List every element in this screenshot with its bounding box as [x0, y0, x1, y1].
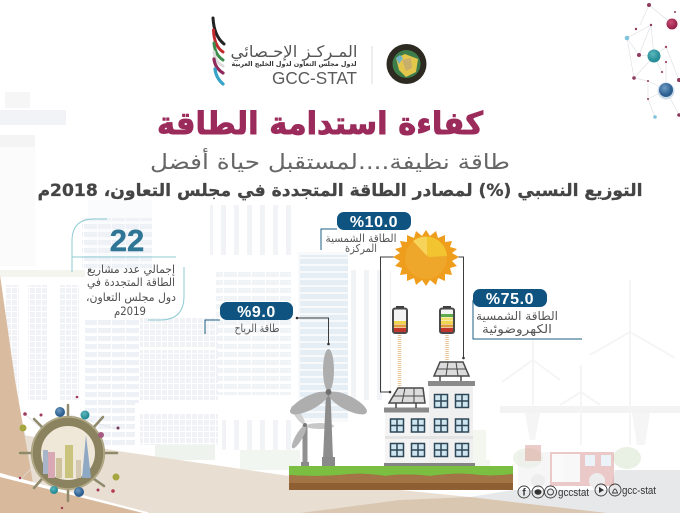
icon: sun [393, 230, 459, 286]
social media row: f [522, 488, 526, 498]
logo Arabic subtitle: لدول مجلس التعاون لدول الخليج العربية [232, 60, 356, 68]
icon: ship-wheel emblem [19, 396, 120, 509]
social media row [518, 484, 656, 499]
callout: concentrated solar 10.0%: الطاقة الشمسية [326, 232, 396, 245]
stat description: 2019م [114, 304, 146, 318]
icon: small wind turbine [289, 404, 334, 467]
callout: photovoltaic 75.0%: الكهروضوئية [482, 322, 552, 337]
faded city background [0, 92, 680, 470]
callout: wind 9.0%: طاقة الرياح [234, 322, 280, 335]
energy links from panels to batteries [400, 335, 447, 388]
stat number: 22 [110, 223, 144, 258]
windows [390, 394, 468, 456]
callout: photovoltaic 75.0% [473, 289, 582, 339]
callout: photovoltaic 75.0%: الطاقة الشمسية [476, 309, 558, 323]
stat description: دول مجلس التعاون، [86, 290, 176, 305]
logo streamers [213, 18, 224, 84]
logo Latin name: GCC-STAT [272, 68, 357, 88]
title: كفاءة استدامة الطاقة [157, 106, 484, 142]
network decoration top right [625, 3, 680, 119]
panel: total projects stat [72, 219, 184, 320]
social icons right [595, 484, 621, 496]
callout: photovoltaic 75.0%: %75.0 [486, 291, 534, 308]
left solar panel [389, 388, 425, 408]
wheel spokes [20, 405, 117, 501]
wheel skyline [43, 435, 91, 478]
connector lines [296, 256, 465, 393]
logo Arabic name: المـركـز الإحـصائي [230, 42, 358, 62]
callout: wind 9.0% [205, 302, 293, 335]
handle gccstat: gccstat [558, 487, 589, 499]
subtitle: طاقة نظيفة....لمستقبل حياة أفضل [150, 148, 510, 174]
callout: concentrated solar 10.0% [321, 212, 411, 255]
stat description: إجمالي عدد مشاريع [87, 262, 175, 277]
ground strip [289, 466, 513, 490]
callout: concentrated solar 10.0%: المركزة [345, 242, 377, 255]
GCC emblem [386, 44, 426, 84]
social icons left [518, 486, 556, 498]
logo: GCC-STAT [213, 18, 426, 88]
icon: left battery [393, 306, 407, 333]
icon: right battery [440, 306, 454, 333]
stat description: الطاقة المتجددة في [87, 275, 175, 289]
callout: wind 9.0%: %9.0 [237, 304, 276, 321]
stat description [86, 262, 176, 318]
bottom ground shapes [0, 275, 680, 513]
handle gcc-stat: gcc-stat [622, 485, 656, 497]
right solar panel [434, 362, 469, 381]
icon: large wind turbine [287, 349, 370, 468]
fire truck [518, 445, 614, 489]
chart heading: التوزيع النسبي (%) لمصادر الطاقة المتجددة في مجلس التعاون، 2018م [38, 181, 643, 201]
callout: concentrated solar 10.0%: %10.0 [350, 214, 398, 231]
building with solar panels [384, 362, 475, 469]
